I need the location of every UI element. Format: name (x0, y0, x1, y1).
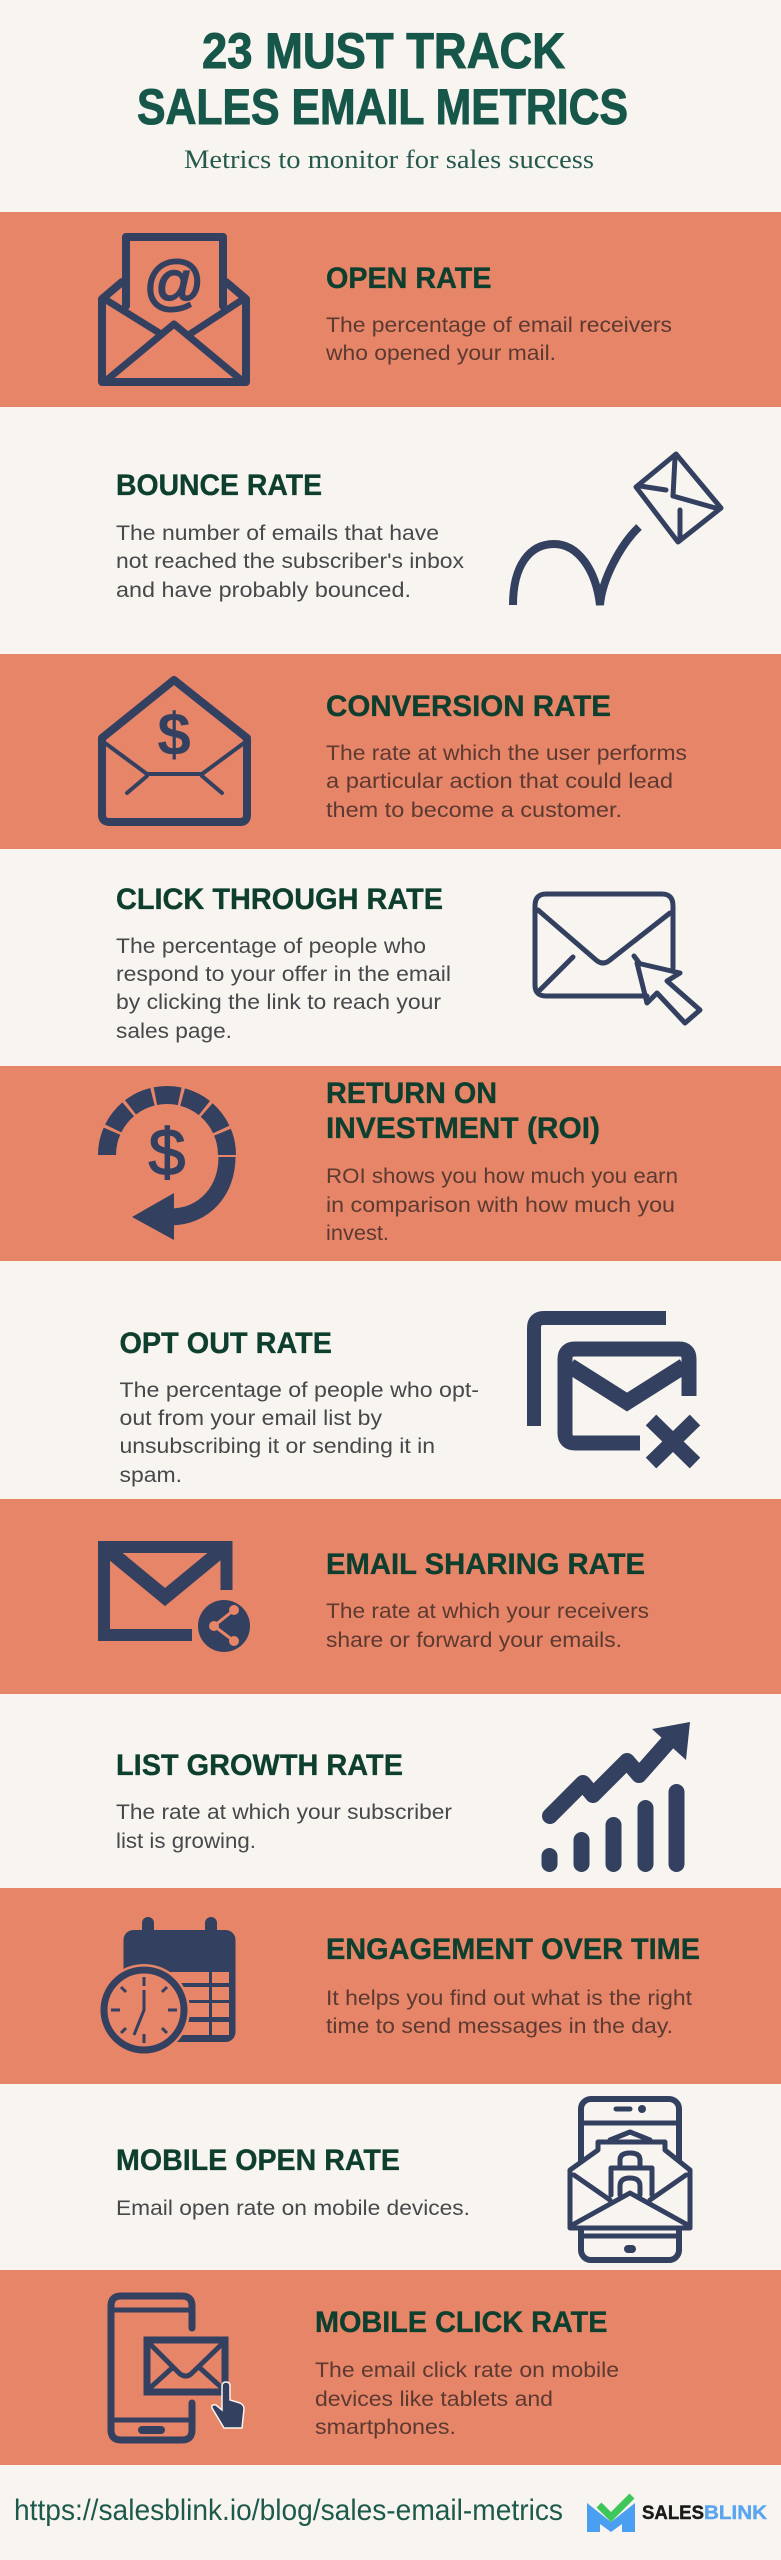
text: mobile click rate description (315, 2359, 619, 2439)
text: mobile open rate description: Email open rate on mobile devices. (116, 2197, 470, 2220)
text: opt out rate description: spam. (120, 1464, 182, 1487)
subtitle: Metrics to monitor for sales success (184, 145, 594, 174)
icon: envelope with dollar sign: $ (157, 701, 191, 768)
panel: opt out rate (0, 1261, 781, 1499)
icon: dollar with circular arrow (107, 1095, 227, 1240)
heading: return on investment: INVESTMENT (ROI) (326, 1112, 600, 1145)
icon: phone with open envelope (570, 2099, 690, 2260)
text: email sharing rate description: share or forward your emails. (326, 1629, 622, 1652)
logo: salesblink (587, 2496, 767, 2532)
panel: email sharing rate (0, 1499, 781, 1694)
logo: salesblink: SALES (642, 2503, 704, 2524)
heading: email sharing rate: EMAIL SHARING RATE (326, 1548, 645, 1581)
hand cursor (212, 2382, 244, 2428)
title (137, 23, 628, 135)
text: email sharing rate description (326, 1600, 649, 1652)
icon: envelope with share badge (104, 1547, 250, 1652)
text: opt out rate description: unsubscribing it or sending it in (120, 1435, 435, 1458)
icon: phone with envelope and hand cursor (111, 2296, 244, 2440)
heading: return on investment (326, 1077, 600, 1145)
text: list growth rate description (116, 1801, 452, 1853)
text: engagement over time description: time to send messages in the day. (326, 2015, 673, 2038)
footer (14, 2494, 767, 2532)
panel: click through rate (0, 849, 781, 1066)
text: email sharing rate description: The rate at which your receivers (326, 1600, 649, 1623)
text: open rate description: The percentage of email receivers (326, 314, 672, 337)
text: opt out rate description: out from your email list by (120, 1407, 383, 1430)
text: click through rate description: by clicking the link to reach your (116, 991, 441, 1014)
heading: mobile click rate: MOBILE CLICK RATE (315, 2306, 608, 2339)
text: list growth rate description: list is growing. (116, 1830, 256, 1853)
icon: envelope with cross (534, 1318, 695, 1463)
text: click through rate description: sales page. (116, 1020, 232, 1043)
text: conversion rate description: them to become a customer. (326, 799, 622, 822)
heading: return on investment: RETURN ON (326, 1077, 497, 1110)
text: mobile click rate description: The email click rate on mobile (315, 2359, 619, 2382)
source url: https://salesblink.io/blog/sales-email-metrics (14, 2494, 563, 2527)
text: opt out rate description (120, 1379, 479, 1487)
heading: opt out rate: OPT OUT RATE (120, 1327, 332, 1360)
icon: envelope with dollar sign (102, 680, 247, 822)
text: open rate description: who opened your mail. (325, 342, 556, 365)
text: mobile click rate description: smartphones. (315, 2416, 456, 2439)
text: conversion rate description: a particular action that could lead (326, 770, 673, 793)
logo: salesblink: BLINK (704, 2503, 767, 2524)
text: click through rate description (116, 935, 451, 1043)
panel: bounce rate (0, 407, 781, 654)
icon: rising bar chart with arrow (542, 1722, 690, 1872)
title: 23 MUST TRACK (202, 23, 565, 79)
text: engagement over time description (326, 1987, 692, 2038)
text: return on investment description: invest. (326, 1222, 389, 1245)
text: opt out rate description: The percentage of people who opt- (120, 1379, 479, 1402)
panel: return on investment (0, 1066, 781, 1261)
panel: mobile click rate (0, 2270, 781, 2465)
text: conversion rate description: The rate at which the user performs (326, 742, 687, 765)
panel: mobile open rate (0, 2084, 781, 2270)
heading: bounce rate: BOUNCE RATE (116, 469, 322, 502)
text: click through rate description: respond to your offer in the email (116, 963, 451, 986)
panel: engagement over time (0, 1888, 781, 2084)
text: bounce rate description: and have probably bounced. (116, 579, 411, 602)
text: click through rate description: The percentage of people who (116, 935, 426, 958)
text: conversion rate description (326, 742, 687, 822)
heading: engagement over time: ENGAGEMENT OVER TIME (326, 1933, 700, 1966)
header (137, 23, 628, 174)
text: bounce rate description: not reached the subscriber's inbox (116, 550, 465, 573)
text: bounce rate description (116, 522, 465, 602)
heading: mobile open rate: MOBILE OPEN RATE (116, 2144, 400, 2177)
icon: bouncing envelope (513, 454, 721, 605)
text: mobile click rate description: devices like tablets and (315, 2388, 553, 2411)
panel: list growth rate (0, 1694, 781, 1888)
icon: dollar with circular arrow: $ (149, 1115, 185, 1189)
panel: open rate (0, 212, 781, 407)
heading: conversion rate: CONVERSION RATE (326, 690, 611, 723)
icon: envelope with cursor (535, 894, 700, 1023)
icon: open envelope with at sign: @ (144, 249, 204, 316)
icon: calendar and clock (98, 1917, 236, 2056)
text: engagement over time description: It helps you find out what is the right (326, 1987, 692, 2010)
title: SALES EMAIL METRICS (137, 79, 628, 135)
icon: open envelope with at sign (102, 237, 246, 382)
text: open rate description (325, 314, 672, 365)
text: return on investment description: in comparison with how much you (326, 1194, 675, 1217)
text: return on investment description (326, 1165, 678, 1245)
text: bounce rate description: The number of emails that have (116, 522, 439, 545)
heading: click through rate: CLICK THROUGH RATE (116, 883, 443, 916)
text: return on investment description: ROI shows you how much you earn (326, 1165, 678, 1188)
heading: open rate: OPEN RATE (326, 262, 492, 295)
panel: conversion rate (0, 654, 781, 849)
heading: list growth rate: LIST GROWTH RATE (116, 1749, 403, 1782)
text: list growth rate description: The rate at which your subscriber (116, 1801, 452, 1824)
